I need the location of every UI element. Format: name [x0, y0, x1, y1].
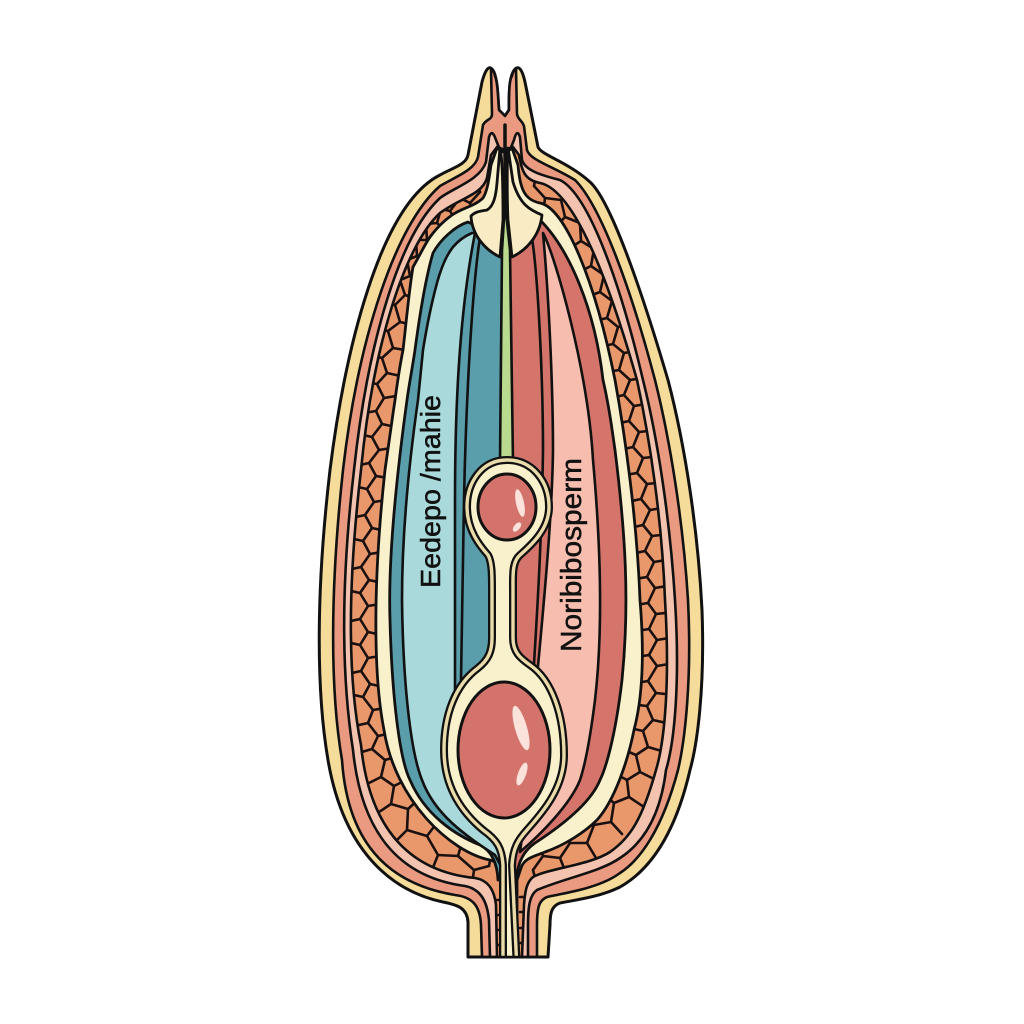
light teal region: [402, 233, 505, 870]
light pink region: [520, 233, 600, 852]
lower bulb highlight: [512, 706, 530, 750]
upper bulb small highlight: [512, 522, 522, 532]
left label: Eedepo /mahie: [415, 395, 446, 588]
sheath tan band: [444, 460, 564, 970]
upper bulb highlight: [515, 489, 525, 517]
centre line: [503, 125, 507, 205]
green tube: [500, 203, 513, 462]
cell walls: [342, 170, 675, 945]
teal chamber: [390, 222, 505, 880]
lower bulb small highlight: [516, 762, 528, 786]
left hood: [471, 148, 503, 257]
red inner line: [531, 232, 543, 680]
outer yellow coat: [319, 68, 703, 957]
lower bulb: [458, 682, 550, 818]
right label: Noribibosperm: [556, 458, 588, 652]
dark teal region: [390, 222, 505, 880]
teal inner line: [461, 237, 480, 680]
cell layer: [342, 147, 675, 957]
red chamber: [505, 220, 626, 880]
sheath with two bulbs: [444, 460, 564, 970]
salmon layer: [333, 70, 689, 957]
sheath outer line: [444, 460, 564, 970]
right hood: [507, 148, 542, 257]
dark red region: [505, 220, 626, 880]
upper bulb: [478, 474, 536, 540]
cream layer: [376, 148, 642, 957]
pale pink layer: [344, 133, 677, 957]
diagram: seed cross-section: [319, 68, 703, 970]
stem base line: [468, 956, 548, 958]
cell band fill: [351, 147, 667, 957]
